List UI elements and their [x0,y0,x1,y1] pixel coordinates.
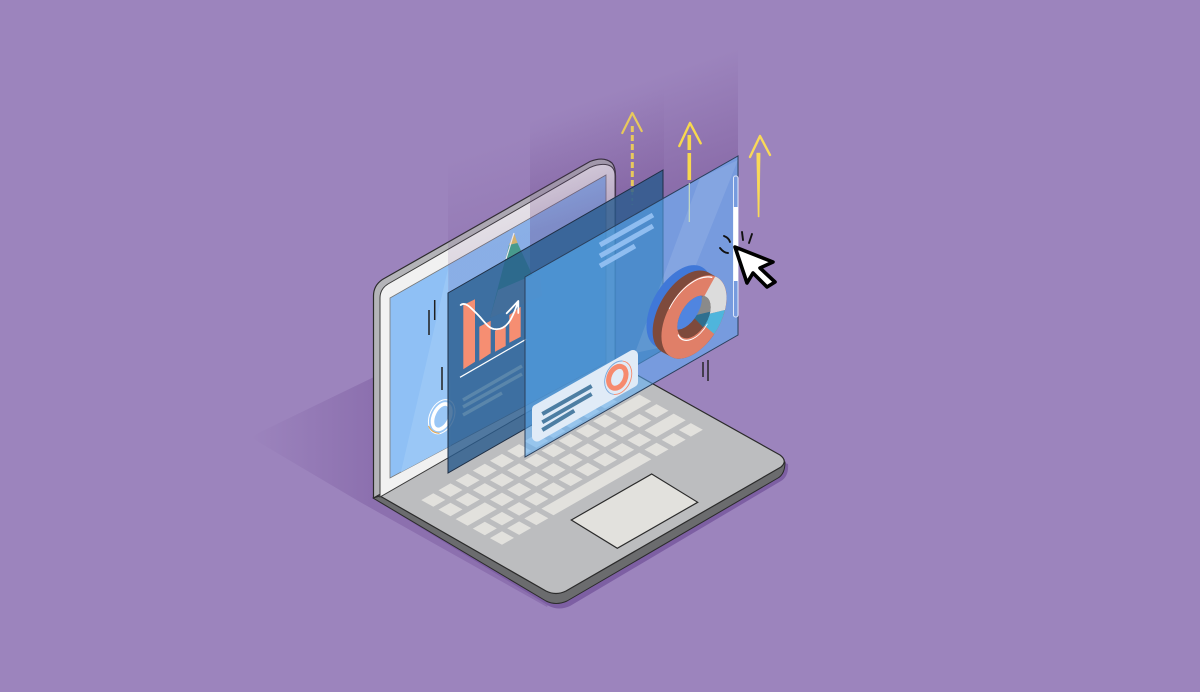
arrow: right [750,136,770,217]
back panel text lines [463,366,522,415]
donut extrusion [685,307,694,322]
donut blue backing [646,251,712,363]
card text lines [542,386,592,430]
back data panel [448,170,663,473]
motion ticks on screen [429,300,442,390]
back panel baseline [460,339,526,377]
front panel glare [635,160,738,353]
back panel bars [463,299,521,369]
floor shadow [250,377,600,607]
arrow: middle [679,123,701,180]
illustration: laptop with floating data panels [300,90,788,608]
screen glare [400,265,451,476]
screen bezel [380,164,615,497]
donut blue segment [705,305,725,340]
card ring chart [599,357,637,399]
laptop base top [380,361,784,594]
screen ring chart [423,395,460,438]
front panel sheet [525,156,738,457]
scrollbar [734,176,738,317]
laptop base side [373,462,785,604]
arrow: dashed muted [622,113,642,205]
donut chart [646,265,727,359]
light beam behind back panel [448,85,664,293]
front panel card [537,355,637,436]
motion ticks under panel [703,360,708,381]
screen pie chart [490,233,542,318]
screen display [390,175,606,478]
laptop [372,159,788,608]
keyboard [427,388,697,541]
pale arrow shaft seen through panel [688,183,690,222]
laptop base shadow [372,400,788,608]
screen frame [374,159,616,498]
donut highlights [669,271,712,353]
back panel trend arrow [461,301,518,329]
icon: mouse cursor [735,247,775,287]
light beam behind front panel [530,40,738,274]
donut grey segment [705,270,727,322]
back panel sheet [448,170,663,473]
click ticks [720,232,752,253]
front data panel [525,156,738,457]
front panel text lines [600,215,653,266]
trackpad [571,474,698,548]
donut face [661,261,727,373]
donut hole [677,296,711,338]
